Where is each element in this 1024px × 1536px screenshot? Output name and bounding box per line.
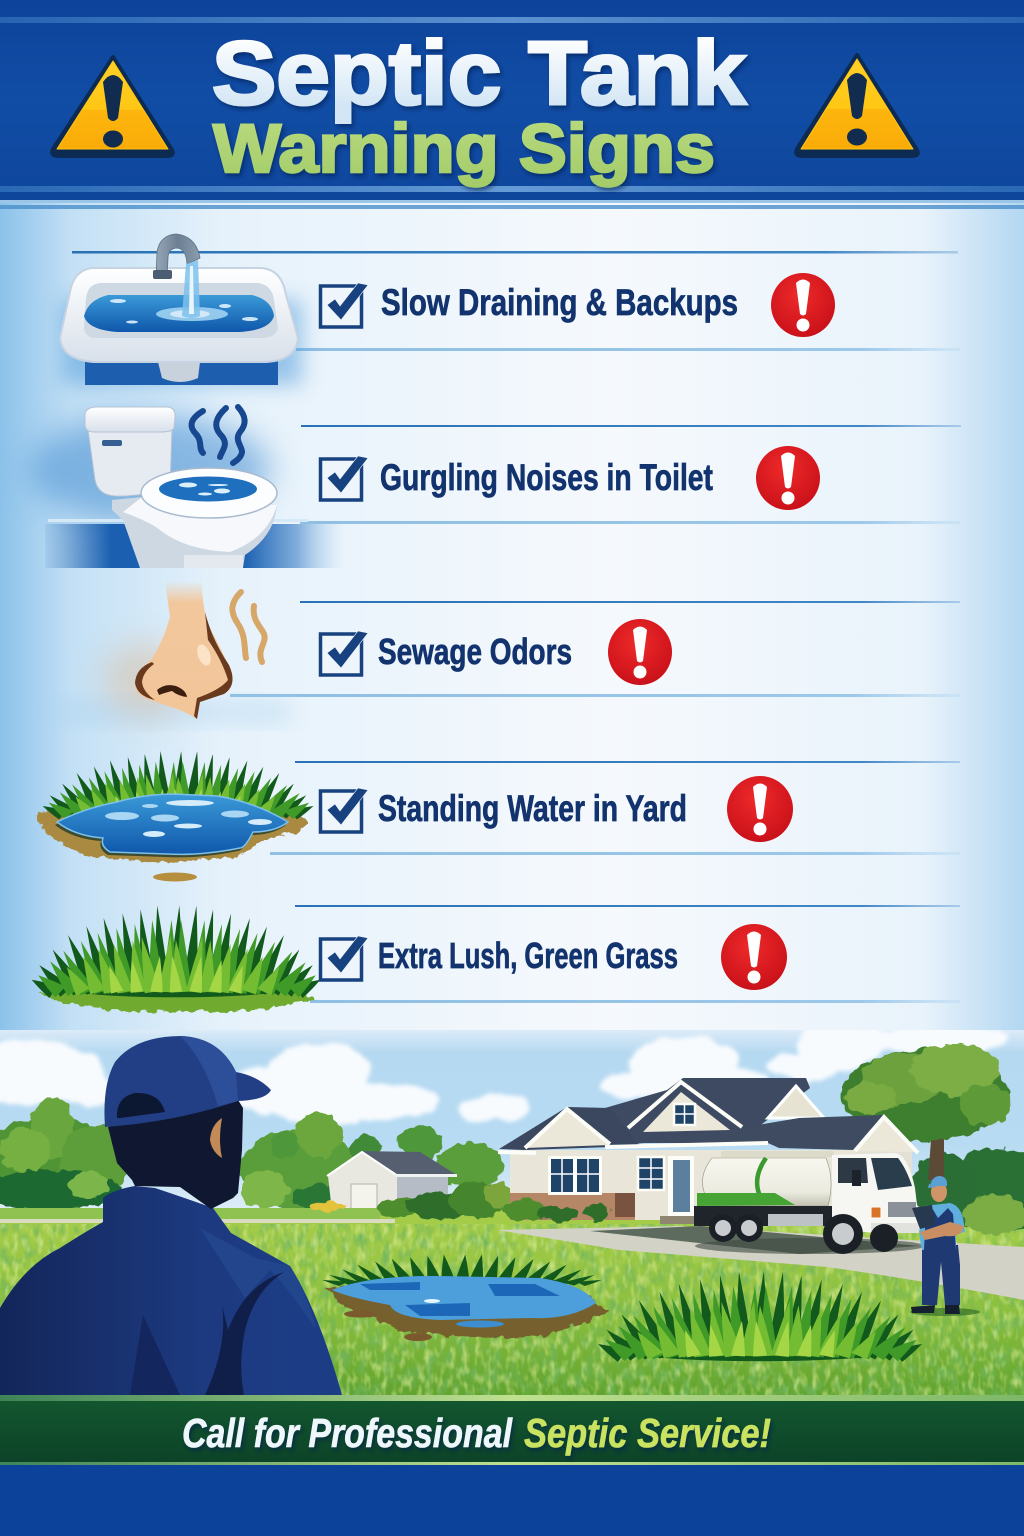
house — [498, 1078, 918, 1224]
service worker — [910, 1176, 980, 1316]
left wing roof — [499, 1107, 640, 1150]
checkbox — [320, 936, 368, 980]
bushes — [310, 1182, 512, 1219]
tank — [88, 430, 172, 496]
checkbox — [320, 456, 368, 500]
illustration: yard scene — [0, 1020, 1024, 1398]
checkbox — [320, 788, 368, 832]
lawn highlights — [0, 1224, 1024, 1396]
label: Gurgling Noises in Toilet — [380, 457, 713, 498]
faucet — [156, 234, 200, 278]
cab — [832, 1153, 920, 1233]
icon: red alert — [756, 446, 820, 510]
icon: red alert — [771, 273, 835, 337]
ground — [40, 988, 316, 1012]
icon: red alert — [608, 619, 672, 685]
water in basin — [84, 295, 274, 332]
label: Sewage Odors — [378, 631, 572, 672]
walls — [510, 1150, 860, 1220]
footer band — [0, 1465, 1024, 1536]
lawn — [0, 1208, 1024, 1398]
panel: row 3 sewage odors — [60, 581, 672, 724]
wheels — [709, 1214, 898, 1254]
rear roof — [605, 1078, 810, 1145]
call to action text white: Call for Professional — [182, 1410, 513, 1456]
driveway — [497, 1226, 1024, 1300]
panel: row 4 standing water — [36, 751, 793, 882]
shrubs — [503, 1199, 611, 1222]
panel: row divider lines — [72, 251, 961, 1003]
icon: puddle with grass — [36, 751, 317, 882]
label: Slow Draining & Backups — [381, 282, 738, 323]
small rear gable — [768, 1086, 824, 1118]
odor wisps — [232, 592, 265, 662]
icon: nose — [60, 581, 290, 724]
cap — [104, 1036, 271, 1127]
icon: lush grass — [28, 905, 324, 1012]
title line 1: Septic Tank — [212, 24, 747, 124]
head — [108, 1095, 243, 1209]
icon: red alert — [721, 924, 787, 990]
grass — [39, 751, 317, 819]
right roof — [634, 1115, 883, 1150]
icon: sink — [60, 234, 302, 385]
lush grass patch in lawn — [593, 1271, 927, 1362]
head and cap — [931, 1186, 947, 1202]
panel: row 1 slow draining — [60, 234, 835, 385]
small garage building — [327, 1151, 457, 1212]
ear — [210, 1118, 222, 1158]
icon: red alert — [727, 776, 793, 842]
sky — [0, 1030, 1024, 1220]
torso — [919, 1203, 965, 1250]
checkbox — [320, 631, 368, 675]
legs — [922, 1245, 960, 1305]
steam — [192, 407, 245, 463]
windows — [548, 1156, 602, 1195]
icon: left warning triangle — [52, 57, 173, 156]
icon: right warning triangle — [796, 55, 918, 156]
checkbox — [320, 283, 368, 327]
label: Standing Water in Yard — [378, 788, 687, 829]
tree right — [841, 1044, 1024, 1235]
background trees middle — [240, 1113, 504, 1211]
label: Extra Lush, Green Grass — [378, 935, 678, 976]
septic truck — [694, 1151, 925, 1254]
call to action banner — [0, 1395, 1024, 1466]
water — [159, 476, 257, 502]
tank — [721, 1151, 834, 1157]
tuft of blades — [28, 905, 324, 998]
title line 2: Warning Signs — [213, 110, 715, 187]
jacket — [0, 1186, 342, 1395]
trim — [498, 1082, 918, 1153]
dormer — [643, 1092, 730, 1132]
seat — [141, 468, 277, 518]
page background panel — [0, 200, 1024, 1040]
brick base — [510, 1193, 635, 1220]
shadow — [695, 1238, 925, 1254]
chassis — [694, 1206, 834, 1226]
panel: row 5 lush grass — [28, 905, 787, 1012]
clipboard and arms — [912, 1205, 935, 1229]
puddle in lawn — [318, 1254, 608, 1341]
clouds — [0, 1020, 1010, 1124]
header banner — [0, 0, 1024, 209]
foreground man with cap — [0, 1036, 342, 1395]
call to action text yellow: Septic Service! — [524, 1410, 771, 1456]
background trees left — [0, 1098, 130, 1213]
mud — [36, 808, 308, 862]
icon: toilet — [30, 407, 345, 568]
water — [55, 797, 286, 857]
bowl — [112, 497, 277, 568]
panel: row 2 gurgling — [30, 407, 820, 568]
lawn texture — [0, 1224, 1024, 1396]
